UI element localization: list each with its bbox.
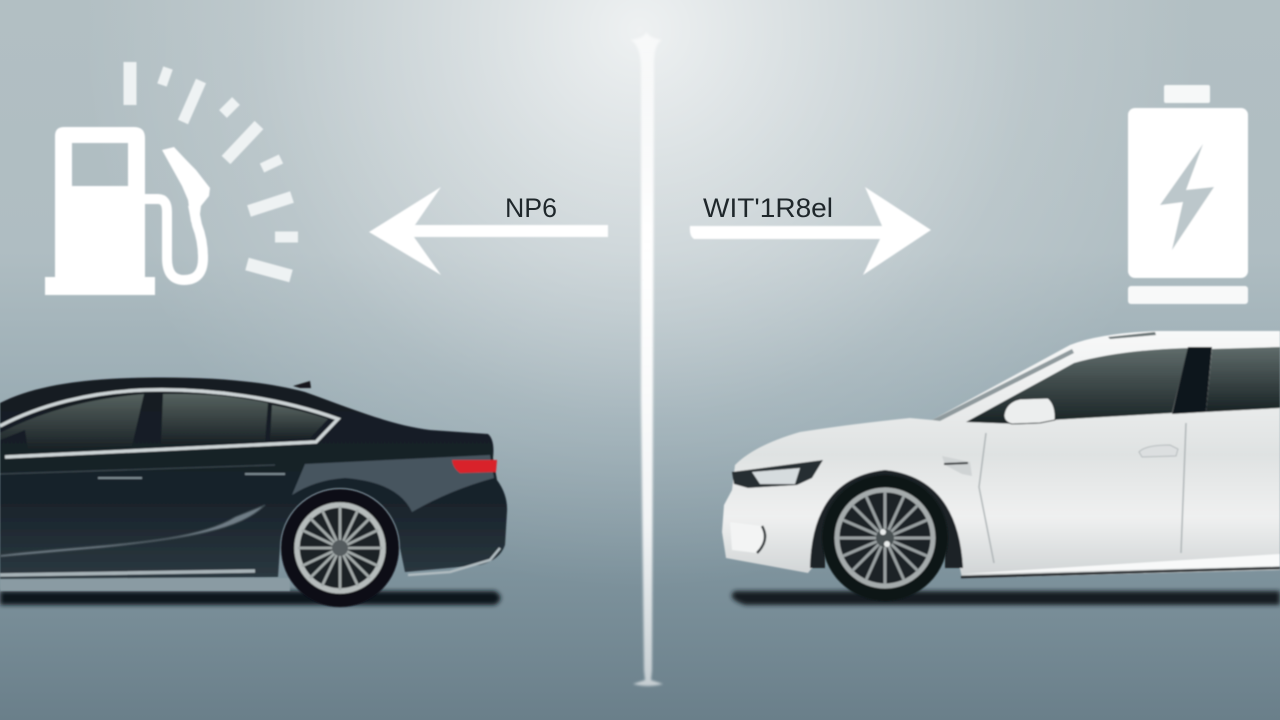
chrome window trim: [0, 390, 338, 457]
bumper chrome: [408, 548, 500, 575]
door handles: [98, 474, 285, 478]
headlight: [732, 460, 823, 488]
side windows: [0, 394, 328, 450]
car body: [0, 378, 507, 579]
pump nozzle: [162, 147, 210, 222]
taillight: [452, 460, 497, 473]
center divider: [630, 32, 663, 686]
left arrow: [369, 187, 608, 275]
dark car wheel: [281, 489, 399, 607]
label: MPG: NP6: [505, 193, 557, 223]
sill line: [961, 568, 1280, 577]
door handle: [1139, 445, 1178, 457]
battery base: [1128, 286, 1248, 304]
icon: battery: [1128, 85, 1248, 304]
pump body: [45, 127, 155, 295]
dark car: [0, 378, 507, 591]
wheel arch: [810, 470, 963, 568]
lightning bolt: [1160, 144, 1214, 250]
rear quarter panel: [292, 455, 494, 512]
fog lamp: [730, 522, 765, 553]
rocker chrome: [0, 571, 255, 575]
white car wheel: [822, 475, 948, 601]
door seams: [979, 423, 1186, 563]
spoiler fin: [293, 381, 311, 388]
pump hose: [145, 199, 203, 280]
underbody strip: [0, 578, 290, 591]
battery cap: [1164, 85, 1210, 103]
mirror: [1004, 398, 1055, 424]
dark car shadow: [0, 591, 500, 605]
label: electric: WIT'1R8el: [703, 193, 833, 223]
icon: fuel pump: [45, 62, 298, 295]
roof rail: [1108, 332, 1156, 339]
character line: [0, 465, 275, 557]
spokes: [298, 506, 382, 590]
white car: [722, 331, 1280, 578]
spokes: [839, 492, 931, 584]
white car shadow: [732, 591, 1280, 605]
fuel gauge ticks: [130, 62, 298, 276]
windshield strip: [932, 349, 1074, 421]
battery body: [1128, 108, 1248, 278]
fender vent: [942, 456, 972, 476]
car body: [722, 331, 1280, 578]
side windows: [966, 347, 1280, 424]
right arrow: [690, 187, 931, 275]
